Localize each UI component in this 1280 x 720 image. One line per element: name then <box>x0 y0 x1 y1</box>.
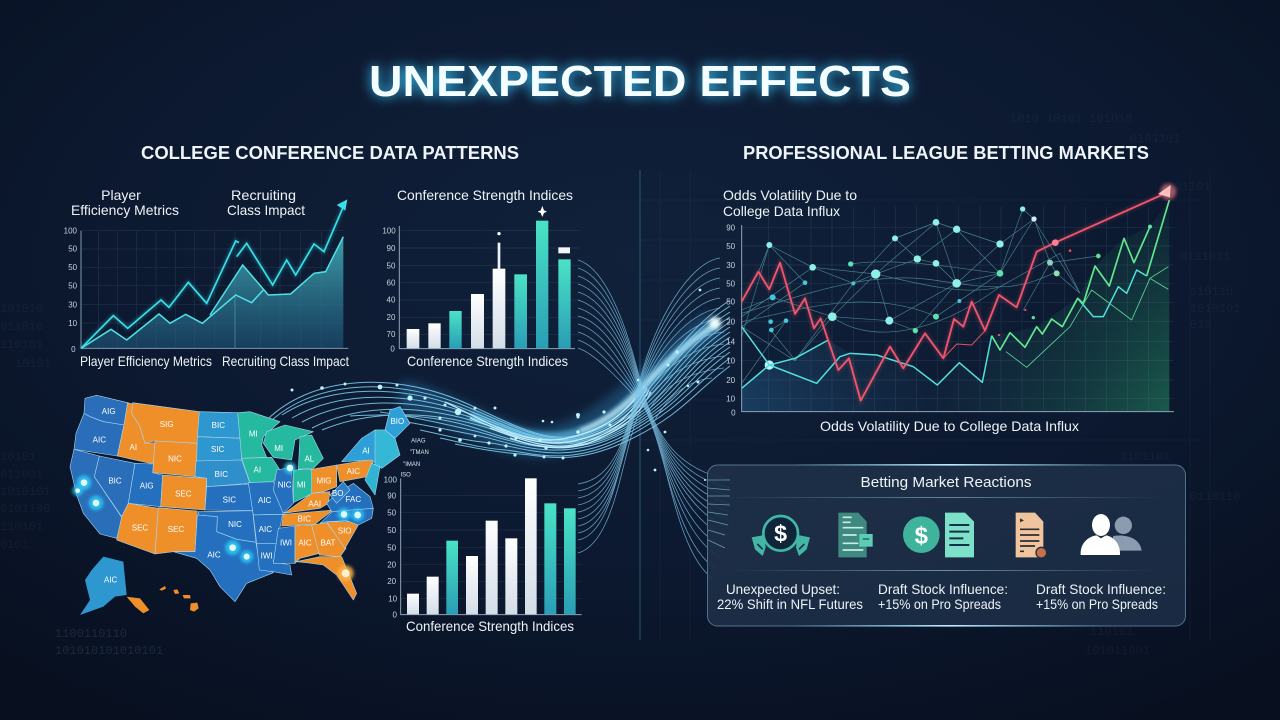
panel: conference strength bar chart bottom <box>384 475 582 634</box>
binary pattern backdrop: 0101101 <box>1130 132 1180 146</box>
map glow markers <box>72 462 364 581</box>
bar chart: 70 <box>387 330 396 339</box>
bar chart: 0 <box>392 610 397 619</box>
volatility line chart: 20 <box>726 376 736 385</box>
volatility line chart: 0 <box>731 409 736 418</box>
map labels: AL <box>304 454 315 463</box>
line chart: efficiency and recruiting: 30 <box>68 300 78 309</box>
line chart: efficiency and recruiting: 10 <box>68 319 78 328</box>
map labels: MI <box>274 444 283 453</box>
binary pattern backdrop: 1010 10101 101010 <box>1010 112 1132 126</box>
bar chart: 90 <box>387 492 397 501</box>
map labels: AIC <box>258 496 272 505</box>
map labels: SIO <box>338 527 352 536</box>
bar chart: 50 <box>387 526 397 535</box>
map labels: "TMAN <box>410 450 429 456</box>
binary pattern backdrop: 0110110 <box>1190 490 1240 504</box>
data ribbon connecting map to markets <box>262 258 730 578</box>
map labels: SIC <box>223 496 236 505</box>
map labels: MIG <box>316 477 332 486</box>
binary pattern backdrop: 110101 <box>0 520 43 534</box>
binary pattern backdrop: 101011001 <box>1085 644 1150 658</box>
line chart: efficiency and recruiting: 100 <box>64 226 78 235</box>
map labels: IWI <box>261 552 273 561</box>
bar chart: 50 <box>387 509 397 518</box>
volatility line chart: 90 <box>726 223 736 232</box>
volatility line chart: 30 <box>726 261 736 270</box>
binary pattern backdrop: 110110 <box>1190 285 1233 299</box>
binary pattern backdrop: 1010101 <box>0 485 50 499</box>
map labels: AIC <box>347 467 360 476</box>
map labels: SIG <box>160 420 174 429</box>
map labels: AIC <box>259 525 272 534</box>
binary pattern backdrop: 1100110110 <box>55 627 127 641</box>
teal line <box>742 270 1147 388</box>
market reaction captions: +15% on Pro Spreads <box>878 596 1001 612</box>
bar chart: 20 <box>387 577 397 586</box>
volatility line chart: 50 <box>726 242 736 251</box>
volatility line chart <box>726 184 1176 418</box>
map labels: AI <box>254 466 261 475</box>
panel: conference strength bar chart bottom: Conference Strength Indices <box>406 618 574 634</box>
map eastern states <box>282 407 410 600</box>
icon: document with tag <box>838 513 873 557</box>
ribbon sparkle dots <box>290 289 706 481</box>
red line <box>742 193 1165 401</box>
panel: odds volatility chart: College Data Influx <box>723 203 840 219</box>
map labels: BIC <box>108 477 122 486</box>
map labels: SEC <box>132 524 148 533</box>
bar chart: 0 <box>390 345 395 354</box>
icon: dollar ring with arrows: $ <box>774 521 787 547</box>
volatility line chart: 50 <box>726 279 736 288</box>
map labels: "IMAN <box>403 462 420 468</box>
binary pattern backdrop: 0111011 <box>1180 250 1230 264</box>
map labels: AIC <box>104 576 118 585</box>
bar chart: 50 <box>387 543 397 552</box>
volatility line chart: 20 <box>726 318 736 327</box>
icons <box>752 513 1142 558</box>
map labels: AIC <box>207 551 221 560</box>
binary pattern backdrop: 110101 <box>1090 625 1133 639</box>
map labels: SEC <box>175 489 192 498</box>
map labels: MI <box>297 480 306 489</box>
line chart: efficiency and recruiting <box>64 199 348 354</box>
binary pattern backdrop: 011010 <box>0 320 43 334</box>
market reaction captions: Unexpected Upset: <box>726 581 840 597</box>
line chart: efficiency and recruiting: 50 <box>68 281 78 290</box>
market reaction captions: +15% on Pro Spreads <box>1036 596 1158 612</box>
map labels: AIAG <box>411 439 426 445</box>
panel: conference strength bar chart top: Conference Strength Indices <box>407 353 568 369</box>
heading: professional: PROFESSIONAL LEAGUE BETTING MARKETS <box>743 143 1149 163</box>
map: US conferences <box>70 395 429 615</box>
icon: coin and document <box>903 513 974 557</box>
panel: betting market reactions <box>708 464 1186 627</box>
map labels: NIC <box>168 455 182 464</box>
line chart: efficiency and recruiting: 50 <box>68 263 78 272</box>
map labels: ISO <box>401 472 411 478</box>
volatility line chart: 50 <box>726 298 736 307</box>
line chart: efficiency and recruiting: 0 <box>71 345 76 354</box>
chart titles and axis captions <box>71 187 349 369</box>
bar chart: 90 <box>387 244 396 253</box>
bright point on fan <box>709 317 721 329</box>
bar chart: 50 <box>387 261 396 270</box>
bar chart: 40 <box>387 296 396 305</box>
bar chart: 20 <box>387 313 396 322</box>
volatility line chart: 10 <box>726 394 736 403</box>
icon: dollar ring with arrows <box>752 516 810 556</box>
map labels: MI <box>249 429 258 438</box>
map labels: SIC <box>211 445 225 454</box>
map labels: AIG <box>102 407 116 416</box>
binary pattern backdrop: 10101 <box>0 450 36 464</box>
bar chart: 10 <box>388 594 398 603</box>
chart titles and axis captions: Recruiting Class Impact <box>222 353 349 369</box>
network mesh <box>742 209 1098 383</box>
bar chart: 20 <box>387 560 397 569</box>
map labels: AI <box>130 443 137 452</box>
map labels: SEC <box>168 525 184 534</box>
binary pattern backdrop: 0101 <box>0 538 29 552</box>
right side background grid <box>640 170 1210 640</box>
map labels: BIC <box>215 470 228 479</box>
binary pattern backdrop: 110101 <box>0 338 43 352</box>
binary pattern backdrop: 1010101 <box>1190 302 1240 316</box>
binary pattern backdrop: 10101 <box>15 357 51 371</box>
volatility line chart: 14 <box>726 338 736 347</box>
bar chart <box>382 206 580 354</box>
panel: odds volatility chart <box>709 184 1176 434</box>
icon: people <box>1081 514 1142 555</box>
bar chart: 100 <box>382 227 396 236</box>
market reaction captions: Draft Stock Influence: <box>1036 581 1166 597</box>
map labels: AIG <box>140 482 154 491</box>
map labels: NIC <box>278 481 292 490</box>
market reaction captions: Draft Stock Influence: <box>878 581 1008 597</box>
map Alaska and Hawaii <box>80 557 199 615</box>
panel: odds volatility chart: Odds Volatility Due to College Data Influx <box>820 418 1079 434</box>
bar chart: 100 <box>384 475 398 484</box>
icon: peach document <box>1016 513 1047 558</box>
map labels: BIC <box>298 514 311 523</box>
fan: odds chart to lower bar chart through crossing <box>578 258 724 553</box>
binary pattern backdrop: 010 <box>1190 318 1212 332</box>
panel: odds volatility chart: Odds Volatility Due to <box>723 187 857 203</box>
market reaction captions: 22% Shift in NFL Futures <box>717 596 863 612</box>
binary pattern backdrop <box>0 112 1240 658</box>
map labels: NIC <box>228 520 242 529</box>
map labels: AI <box>362 446 370 455</box>
panel overlay of data lines <box>708 480 730 548</box>
icon: coin and document: $ <box>915 522 928 549</box>
map western and central states <box>70 395 323 602</box>
market reaction captions <box>717 581 1166 612</box>
binary pattern backdrop: 0101100 <box>0 502 50 516</box>
map labels: AIC <box>298 538 312 547</box>
map labels: BAT <box>321 538 336 547</box>
binary pattern backdrop: 101010101010101 <box>55 644 163 658</box>
map labels <box>93 407 429 585</box>
binary pattern backdrop: 1101101 <box>1160 180 1210 194</box>
map labels: AAI <box>308 499 321 508</box>
chart titles and axis captions: Recruiting <box>231 187 296 203</box>
line chart: efficiency and recruiting: 50 <box>68 245 78 254</box>
map labels: BO <box>332 489 343 498</box>
chart titles and axis captions: Player <box>101 187 141 203</box>
binary pattern backdrop: 011001 <box>0 468 43 482</box>
panel: betting market reactions: Betting Market Reactions <box>860 474 1032 491</box>
fan: chart to reactions panel through crossing <box>578 260 730 578</box>
map labels: BIO <box>390 417 404 426</box>
chart titles and axis captions: Player Efficiency Metrics <box>80 353 212 369</box>
binary pattern backdrop: 101010 <box>0 302 43 316</box>
chart titles and axis captions: Efficiency Metrics <box>71 202 179 218</box>
panel: chart player efficiency and recruiting <box>64 187 349 369</box>
map labels: AIC <box>93 436 106 445</box>
title: UNEXPECTED EFFECTS <box>369 57 911 106</box>
map labels: IWI <box>280 539 292 548</box>
bar chart <box>384 475 582 619</box>
map labels: BIC <box>212 421 225 430</box>
heading: college: COLLEGE CONFERENCE DATA PATTERNS <box>141 143 519 163</box>
green line <box>992 200 1169 350</box>
panel: conference strength bar chart top: Conference Strength Indices <box>397 187 573 203</box>
bar chart: 60 <box>387 279 396 288</box>
chart titles and axis captions: Class Impact <box>227 202 305 218</box>
map labels: FAC <box>346 495 361 504</box>
binary pattern backdrop: 1101101 <box>1120 450 1170 464</box>
center divider line <box>639 170 641 640</box>
panel: conference strength bar chart top <box>382 187 580 369</box>
volatility line chart: 10 <box>726 357 736 366</box>
title: UNEXPECTED EFFECTS <box>369 57 911 106</box>
